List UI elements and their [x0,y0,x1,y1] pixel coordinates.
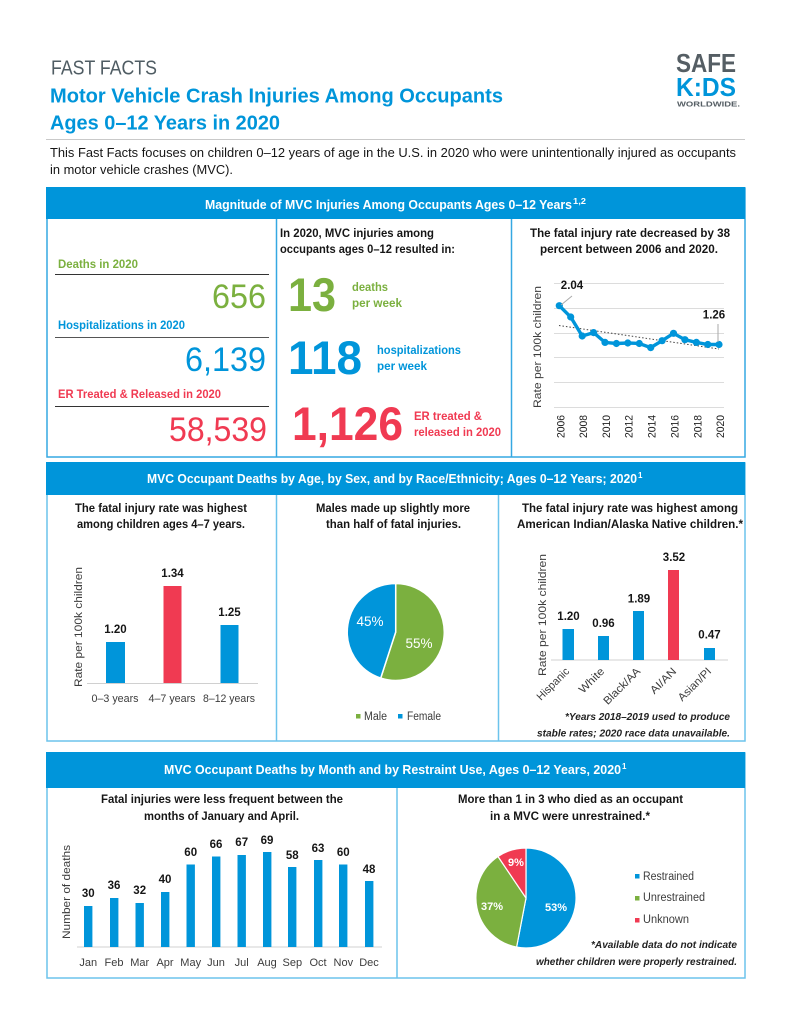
bar chart: deaths by month: 58 [286,850,299,862]
footnote: race data years: *Years 2018–2019 used to produce [565,711,730,723]
line chart: fatal injury rate 2006-2020: 2012 [624,415,636,438]
section heading: month and restraint use [46,752,745,788]
bar chart: fatal injury rate by race and ethnicity [535,552,728,707]
bar chart: fatal injury rate by race and ethnicity: 1.89 [628,594,650,606]
big number: 118 hospitalizations per week: hospitalizations [377,343,461,357]
chart heading: restraint use [458,792,683,823]
panel: deaths by month and restraint use [46,752,745,978]
logo: Safe Kids Worldwide: WORLDWIDE. [677,100,740,108]
bar chart: fatal injury rate by race and ethnicity: White [577,666,607,696]
bar chart: fatal injury rate by age: 1.20 [104,624,127,636]
big number: 13 deaths per week: per week [352,296,402,310]
section heading: magnitude [46,187,745,219]
stat: hospitalizations in 2020: 6,139 [185,341,266,379]
big number: 118 hospitalizations per week: per week [377,359,427,373]
bar chart: deaths by month [61,835,382,969]
big number: 118 hospitalizations per week: 118 [288,331,362,384]
line chart: fatal injury rate 2006-2020: 2006 [555,415,567,438]
section heading: deaths by age, sex, race [46,462,745,495]
title block [50,56,503,134]
chart heading: restraint use: in a MVC were unrestrained.* [490,809,650,823]
big number: 118 hospitalizations per week [288,331,461,384]
big number: 1,126 ER treated and released: released in 2020 [414,425,501,439]
bar chart: deaths by month: 69 [261,835,273,847]
legend: restraint use [635,871,705,926]
chart heading: race: American Indian/Alaska Native children.* [517,517,743,531]
stat: deaths in 2020 [55,257,269,316]
bar chart: fatal injury rate by age [73,567,258,705]
chart heading: month: months of January and April. [144,809,299,823]
line chart: fatal injury rate 2006-2020: 1.26 [703,310,725,322]
main title: Ages 0–12 Years in 2020 [50,112,280,134]
stat: ER treated and released in 2020: ER Treated & Released in 2020 [58,387,221,401]
legend: restraint use: Unknown [643,914,689,926]
pie chart: restraint use: 53% [545,902,567,914]
big number: 1,126 ER treated and released: 1,126 [292,397,403,450]
bar chart: deaths by month: Number of deaths [61,844,73,939]
legend: sex: Female [407,711,441,723]
bar chart: deaths by month: Nov [334,957,354,969]
stat: ER treated and released in 2020: 58,539 [169,411,267,449]
footnote: race data years [537,711,730,740]
bar chart: fatal injury rate by age: 1.34 [161,568,184,580]
stat: hospitalizations in 2020 [55,318,269,379]
bar chart: deaths by month: Apr [156,957,174,969]
bar chart: fatal injury rate by race and ethnicity: 0.47 [698,630,721,642]
bar chart: fatal injury rate by race and ethnicity: Hispanic [535,665,572,703]
big number: 13 deaths per week: 13 [288,268,336,321]
bar chart: fatal injury rate by age: 8–12 years [203,693,255,705]
line chart: fatal injury rate 2006-2020: 2020 [715,415,727,438]
chart heading: month: Fatal injuries were less frequent between the [101,792,343,806]
logo: Safe Kids Worldwide [676,48,740,108]
stat: hospitalizations in 2020: Hospitalizations in 2020 [58,318,185,332]
column heading: weekly results: In 2020, MVC injuries among [280,226,434,240]
stat: deaths in 2020: 656 [212,278,266,316]
bar chart: deaths by month: 36 [108,880,120,892]
intro text: This Fast Facts focuses on children 0–12 years of age in the U.S. in 2020 who were unintentionally injured as occupants [50,145,736,160]
bar chart: deaths by month: 60 [337,847,350,859]
column heading: weekly results: occupants ages 0–12 resulted in: [280,242,455,256]
bar chart: fatal injury rate by race and ethnicity: 1.20 [557,611,580,623]
chart heading: month [101,792,343,823]
bar chart: deaths by month: 40 [159,874,171,886]
legend: restraint use: Restrained [643,871,694,883]
bar chart: deaths by month: May [180,957,202,969]
panel: deaths by age, sex, race [46,462,745,741]
chart heading: sex: than half of fatal injuries. [326,517,461,531]
section heading: deaths by age, sex, race: MVC Occupant Deaths by Age, by Sex, and by Race/Ethnicity; Ages 0–12 Years; 2020 [147,472,637,486]
logo: Safe Kids Worldwide: SAFE [676,48,736,78]
bar chart: deaths by month: 63 [312,843,324,855]
legend: sex: Male [364,711,387,723]
footnote: restraint data: *Available data do not indicate [591,939,737,951]
chart heading: race [517,501,743,531]
legend: restraint use: Unrestrained [643,892,705,904]
stat: ER treated and released in 2020 [55,387,269,449]
bar chart: deaths by month: 66 [210,839,222,851]
bar chart: fatal injury rate by age: 4–7 years [148,693,196,705]
bar chart: deaths by month: 60 [184,847,197,859]
line chart: fatal injury rate 2006-2020: 2.04 [561,280,584,292]
bar chart: fatal injury rate by race and ethnicity: Black/AA [601,665,644,707]
legend: sex [356,711,441,723]
bar chart: deaths by month: Sep [283,957,302,969]
footnote: race data years: stable rates; 2020 race data unavailable. [537,728,730,740]
column heading: weekly results [280,226,455,256]
chart heading: fatal injury rate trend: percent between 2006 and 2020. [540,242,718,256]
bar chart: fatal injury rate by race and ethnicity: 0.96 [592,618,615,630]
main title: Motor Vehicle Crash Injuries Among Occupants [50,84,503,108]
line chart: fatal injury rate 2006-2020: 2016 [669,415,681,438]
line chart: fatal injury rate 2006-2020: 2010 [601,415,613,438]
bar chart: fatal injury rate by race and ethnicity: Asian/PI [676,666,714,704]
bar chart: deaths by month: 30 [82,888,95,900]
bar chart: deaths by month: Mar [130,957,150,969]
line chart: fatal injury rate 2006-2020: Rate per 100k children [532,286,544,408]
bar chart: fatal injury rate by race and ethnicity: Rate per 100k children [537,554,549,676]
chart heading: fatal injury rate trend [530,226,730,256]
section heading: month and restraint use: MVC Occupant Deaths by Month and by Restraint Use, Ages 0–12 Years, 2020 [164,763,621,777]
eyebrow: fast facts: FAST FACTS [51,56,157,80]
footnote: restraint data [536,939,737,968]
pie chart: restraint use: 9% [508,857,524,869]
bar chart: deaths by month: Feb [105,957,123,969]
pie chart: fatal injuries by sex: 45% [356,614,384,629]
bar chart: fatal injury rate by age: 0–3 years [92,693,139,705]
pie chart: fatal injuries by sex [347,584,444,723]
section heading: month and restraint use: 1 [622,762,627,771]
panel: magnitude of MVC injuries [46,187,745,457]
bar chart: deaths by month: 67 [235,837,248,849]
chart heading: fatal injury rate trend: The fatal injury rate decreased by 38 [530,226,730,240]
chart heading: sex [316,501,470,531]
big number: 1,126 ER treated and released: ER treated & [414,409,482,423]
bar chart: deaths by month: Oct [309,957,327,969]
logo: Safe Kids Worldwide: K:DS [676,72,736,102]
chart heading: age: The fatal injury rate was highest [75,501,247,515]
chart heading: sex: Males made up slightly more [316,501,470,515]
pie chart: fatal injuries by sex: 55% [405,636,433,651]
chart heading: restraint use: More than 1 in 3 who died as an occupant [458,792,683,806]
bar chart: deaths by month: Dec [359,957,379,969]
bar chart: deaths by month: 32 [133,885,146,897]
bar chart: fatal injury rate by age: 1.25 [218,607,241,619]
bar chart: fatal injury rate by race and ethnicity: 3.52 [663,552,685,564]
bar chart: deaths by month: Aug [257,957,277,969]
bar chart: deaths by month: Jun [207,957,225,969]
main title [50,84,503,134]
footnote: restraint data: whether children were properly restrained. [536,956,737,968]
section heading: magnitude: 1,2 [573,197,587,206]
big number: 13 deaths per week [288,268,402,321]
bar chart: deaths by month: 48 [363,864,376,876]
intro text: in motor vehicle crashes (MVC). [50,162,233,177]
chart heading: age [75,501,247,531]
bar chart: deaths by month: Jan [79,957,97,969]
line chart: fatal injury rate 2006-2020: 2014 [646,415,658,438]
bar chart: deaths by month: Jul [235,957,249,969]
chart heading: age: among children ages 4–7 years. [77,517,245,531]
stat: deaths in 2020: Deaths in 2020 [58,257,138,271]
pie chart: restraint use: 37% [481,901,503,913]
line chart: fatal injury rate 2006-2020: 2008 [578,415,590,438]
line chart: fatal injury rate 2006-2020: 2018 [692,415,704,438]
section heading: magnitude: Magnitude of MVC Injuries Among Occupants Ages 0–12 Years [205,198,572,212]
bar chart: fatal injury rate by age: Rate per 100k children [73,567,85,687]
pie chart: restraint use [476,848,576,948]
line chart: fatal injury rate 2006-2020 [532,280,727,438]
intro text [50,145,736,177]
section heading: deaths by age, sex, race: 1 [638,471,643,480]
big number: 13 deaths per week: deaths [352,280,388,294]
bar chart: fatal injury rate by race and ethnicity: AI/AN [648,666,679,697]
chart heading: race: The fatal injury rate was highest among [522,501,738,515]
big number: 1,126 ER treated and released [292,397,501,450]
